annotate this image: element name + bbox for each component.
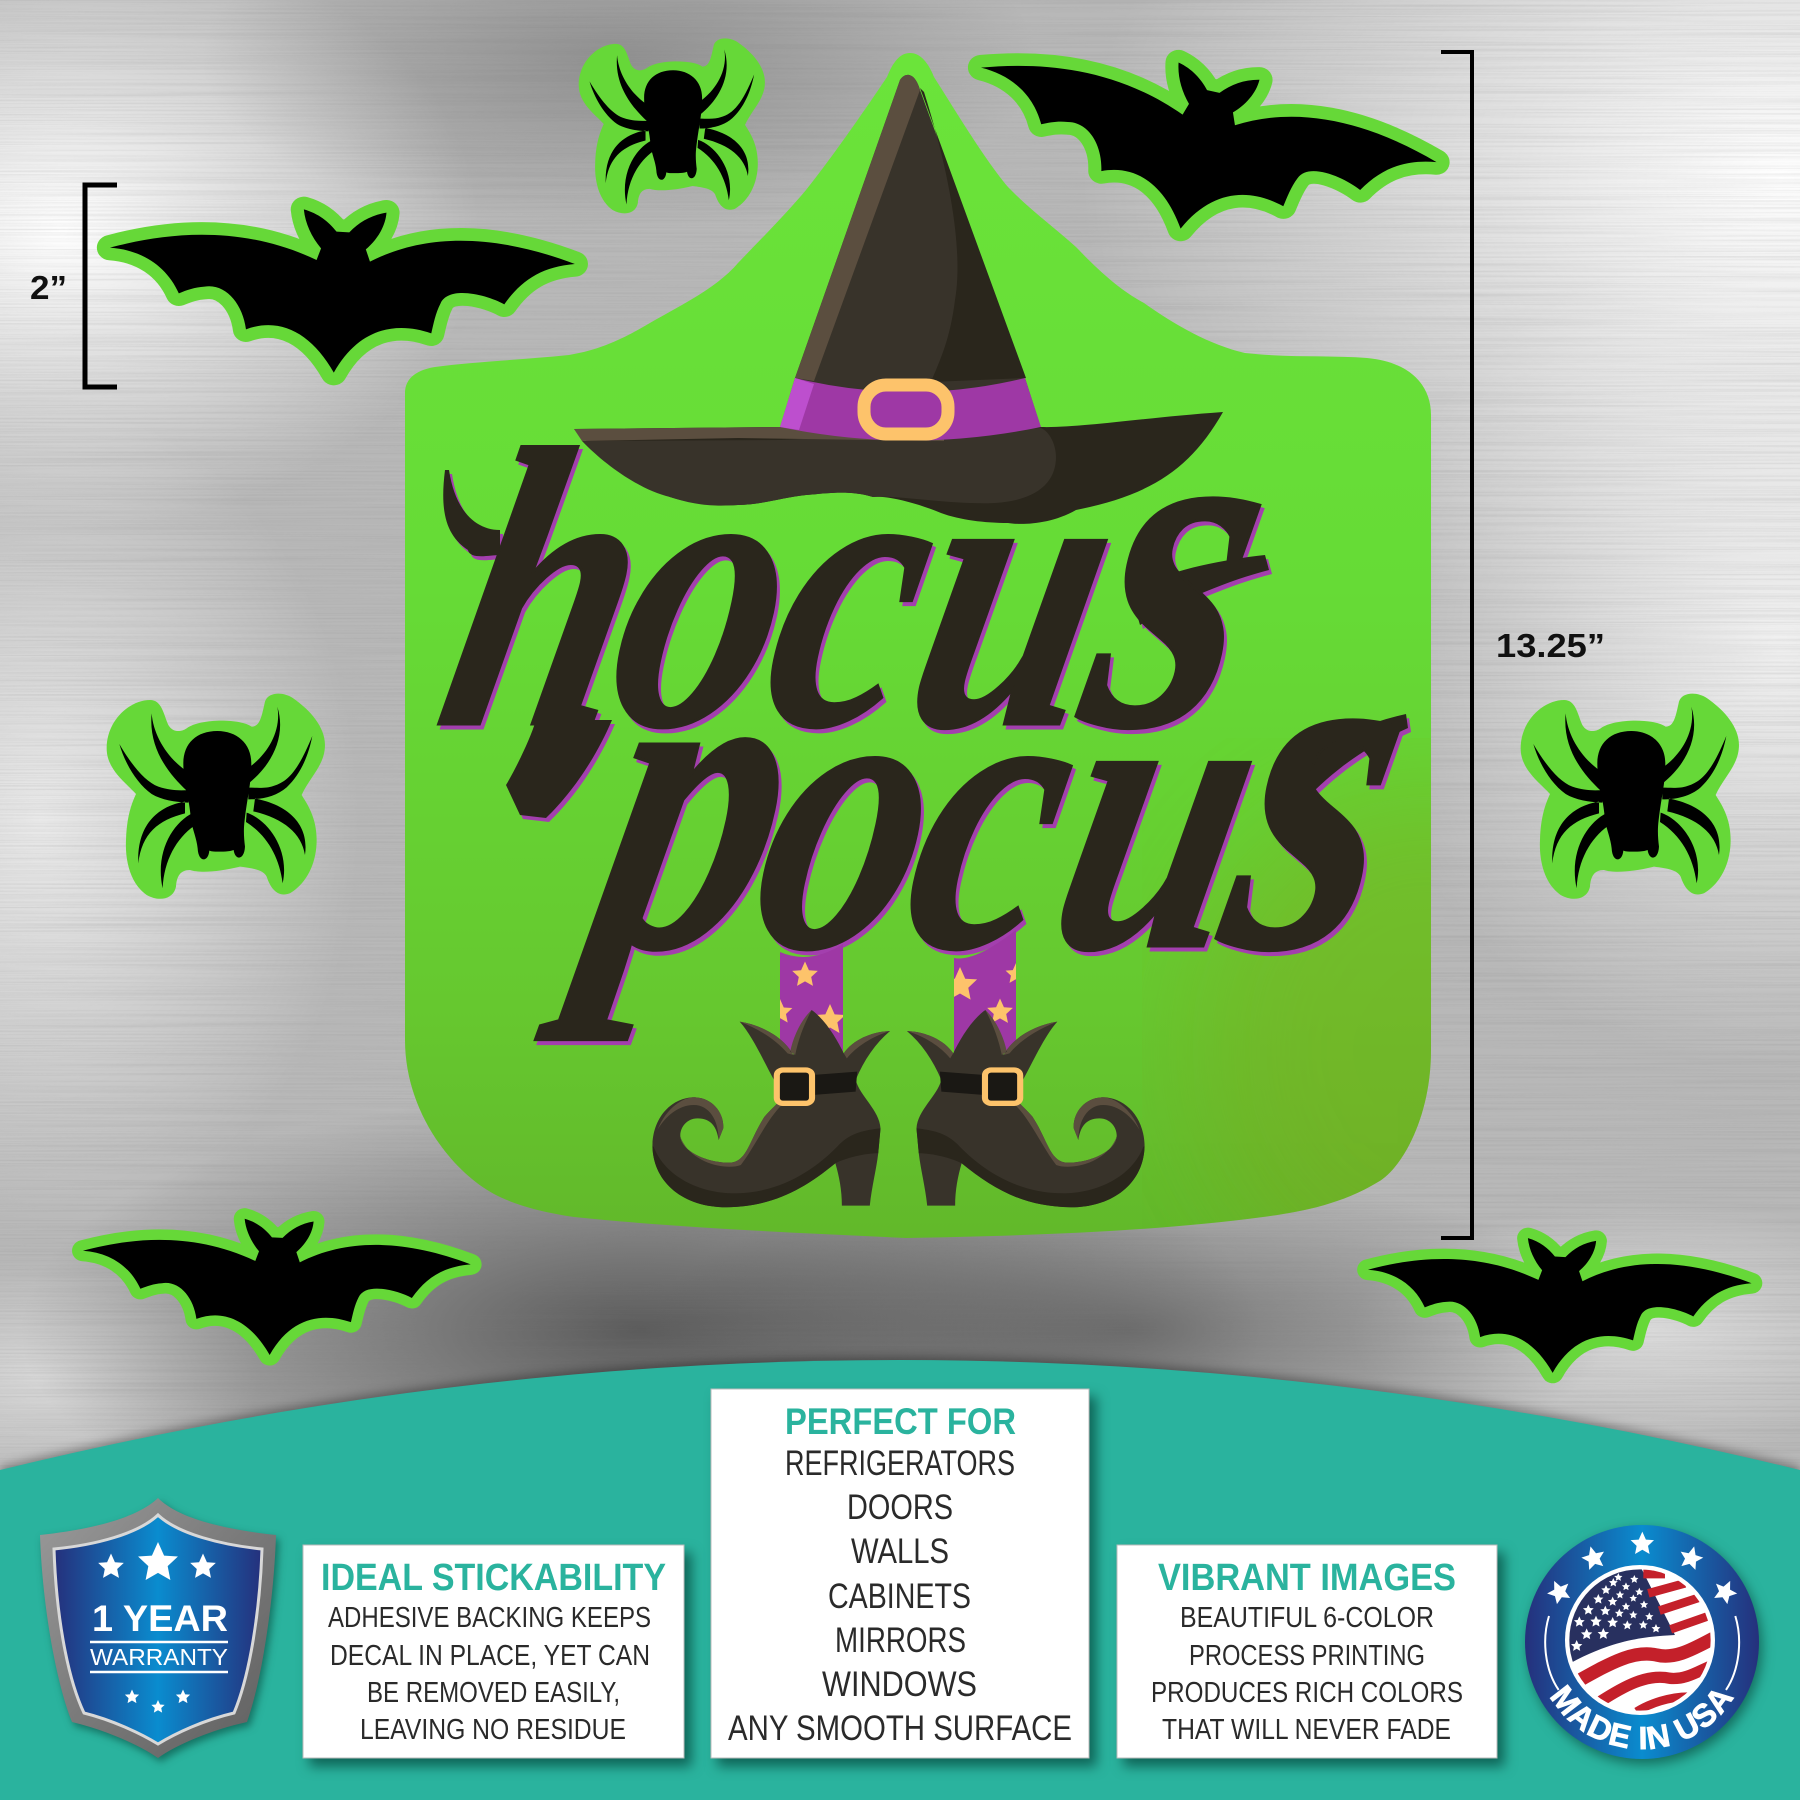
surface list: DOORS: [847, 1488, 953, 1527]
flag: [1543, 1532, 1741, 1715]
witch legs and boots: [652, 930, 1145, 1207]
lower left bat: [83, 1219, 471, 1355]
body text: PRODUCES RICH COLORS: [1151, 1677, 1463, 1709]
heading: PERFECT FOR: [785, 1401, 1016, 1442]
hat brim: [574, 412, 1223, 524]
surface list: WINDOWS: [822, 1665, 977, 1704]
heading: IDEAL STICKABILITY: [321, 1557, 666, 1599]
surface list: WALLS: [851, 1532, 949, 1571]
top spider: [579, 38, 765, 213]
heading: VIBRANT IMAGES: [1158, 1557, 1456, 1599]
surface list: [728, 1444, 1072, 1748]
left striped sock: [780, 944, 843, 1052]
word: hocus: u: [881, 369, 1153, 811]
right boot: [907, 1010, 1145, 1207]
dimension: 2 inch bracket: 2”: [30, 269, 67, 306]
word: pocus: u: [1025, 591, 1297, 1033]
body text: PROCESS PRINTING: [1189, 1640, 1425, 1672]
hocus pocus lettering: [410, 297, 1456, 1051]
body text: [1151, 1602, 1463, 1746]
upper left bat: [110, 209, 575, 373]
word: pocus: o: [725, 591, 979, 1033]
word: hocus: h: [413, 369, 685, 811]
sock stars: [768, 962, 1026, 1033]
main green decal backing: [405, 53, 1431, 1238]
surface list: CABINETS: [828, 1577, 971, 1616]
decorative swashes: [443, 470, 1408, 818]
panel: perfect for: [711, 1389, 1089, 1758]
dimension: 13.25 inch bracket: [1441, 52, 1605, 1238]
surface list: ANY SMOOTH SURFACE: [728, 1709, 1072, 1748]
hat cone: [780, 75, 1041, 428]
left boot: [652, 1010, 890, 1207]
top right bat: [960, 30, 1446, 269]
body text: BE REMOVED EASILY,: [367, 1677, 620, 1709]
word: hocus: s: [1048, 297, 1316, 829]
right spider: [1521, 694, 1739, 899]
warranty text: 1 YEAR: [92, 1598, 228, 1639]
curved label: [1535, 1642, 1749, 1749]
badge disc: [1525, 1525, 1759, 1759]
left spider: [107, 694, 325, 899]
made in usa badge: MADE IN USA: [1550, 1684, 1734, 1750]
panel: ideal stickability: [303, 1545, 684, 1758]
lower right bat: [1368, 1238, 1752, 1373]
body text: BEAUTIFUL 6-COLOR: [1180, 1602, 1434, 1634]
teal footer band: [0, 1360, 1800, 1800]
body text: [328, 1602, 651, 1746]
warranty badge: WARRANTY: [90, 1644, 228, 1670]
made in usa badge: [1521, 1523, 1769, 1771]
warranty badge: [40, 1498, 276, 1758]
body text: LEAVING NO RESIDUE: [360, 1714, 626, 1746]
side arcs: [1545, 1616, 1739, 1690]
dimension: 2 inch bracket: [30, 185, 117, 387]
hat band: [780, 378, 1041, 440]
word: hocus: o: [581, 369, 835, 811]
hat buckle: [864, 385, 948, 434]
surface list: MIRRORS: [835, 1621, 966, 1660]
word: hocus: c: [737, 369, 974, 811]
stars: [98, 1542, 216, 1713]
shield: [40, 1498, 276, 1758]
badge stars: [1543, 1532, 1741, 1606]
body text: THAT WILL NEVER FADE: [1162, 1714, 1451, 1746]
word: pocus: s: [1188, 519, 1456, 1051]
dimension: 13.25 inch bracket: 13.25”: [1496, 627, 1605, 664]
witch hat: [574, 75, 1223, 524]
body text: ADHESIVE BACKING KEEPS: [328, 1602, 651, 1634]
word: pocus: c: [877, 591, 1114, 1033]
panel: vibrant images: [1117, 1545, 1497, 1758]
surface list: REFRIGERATORS: [785, 1444, 1015, 1483]
body text: DECAL IN PLACE, YET CAN: [330, 1640, 650, 1672]
right striped sock: [954, 930, 1016, 1052]
word: pocus: p: [532, 555, 839, 1042]
